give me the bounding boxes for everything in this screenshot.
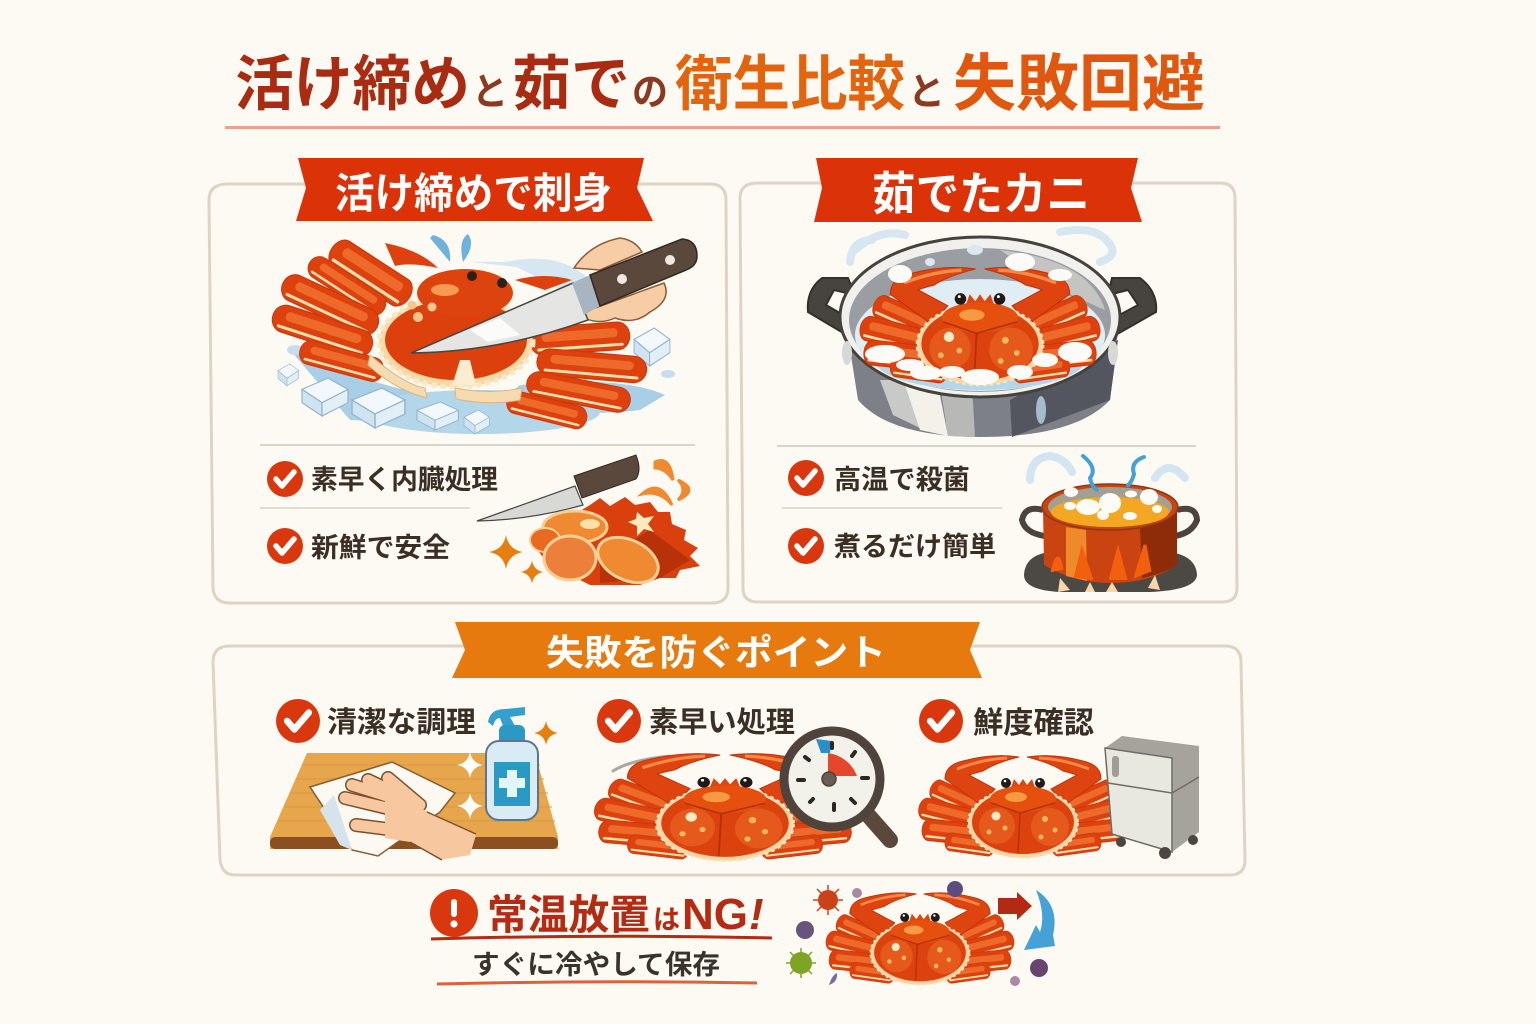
point: freshness check <box>919 699 1094 743</box>
banner: boiled crab: 茹でたカニ <box>872 168 1090 220</box>
panel: boiled crab <box>740 158 1237 602</box>
check item: quick gutting <box>267 461 498 497</box>
banner: failure prevention <box>452 622 982 678</box>
illustration: pot on burner <box>1022 456 1197 592</box>
illustration: crab and timer magnifier <box>592 731 890 861</box>
panel: failure prevention <box>213 622 1245 875</box>
check item: high temperature sterilisation <box>788 460 970 496</box>
warning: room temperature storage is NG: 常温放置 <box>487 892 650 938</box>
point: quick processing: 素早い処理 <box>649 706 795 739</box>
illustration: board, cloth, hand, sanitiser <box>270 707 558 860</box>
check item: fresh and safe: 新鮮で安全 <box>311 533 450 563</box>
check item: simply boil <box>788 528 996 564</box>
advice: chill and store right away: すぐに冷やして保存 <box>472 950 720 980</box>
banner: boiled crab <box>814 158 1142 222</box>
title: と <box>472 72 508 114</box>
check item: simply boil: 煮るだけ簡単 <box>834 532 996 562</box>
warning: room temperature storage is NG: ! <box>749 890 764 939</box>
illustration: knife and sashimi crab <box>477 455 700 592</box>
check item: fresh and safe <box>267 528 450 564</box>
banner: sashimi <box>296 158 653 221</box>
illustration: crab and fridge <box>916 736 1199 859</box>
point: quick processing <box>597 699 795 743</box>
warning: room temperature storage is NG: NG <box>682 890 748 939</box>
point: clean cooking <box>276 699 476 743</box>
panel: live-kill sashimi <box>209 158 728 603</box>
point: clean cooking: 清潔な調理 <box>327 706 476 739</box>
warning: room temperature storage is NG <box>430 889 772 939</box>
point: freshness check: 鮮度確認 <box>973 707 1094 740</box>
banner: failure prevention: 失敗を防ぐポイント <box>546 632 886 673</box>
illustration: crab cut with knife on ice <box>269 234 697 434</box>
check item: high temperature sterilisation: 高温で殺菌 <box>834 465 970 495</box>
title: と <box>908 72 945 114</box>
title: 失敗回避 <box>953 50 1205 119</box>
warning: room temperature storage is NG: は <box>653 905 680 935</box>
title: の <box>632 72 668 114</box>
check item: quick gutting: 素早く内臓処理 <box>311 465 498 495</box>
title: 活け締め <box>235 51 470 118</box>
divider and checklist <box>777 446 1196 564</box>
title: 茹で <box>512 51 630 118</box>
title <box>225 50 1220 129</box>
banner: sashimi: 活け締めで刺身 <box>335 170 612 217</box>
divider and checklist <box>260 445 695 564</box>
title: 衛生比較 <box>675 51 905 118</box>
illustration: crab in stock pot <box>808 230 1156 437</box>
illustration: crab with bacteria and arrows <box>786 881 1055 986</box>
